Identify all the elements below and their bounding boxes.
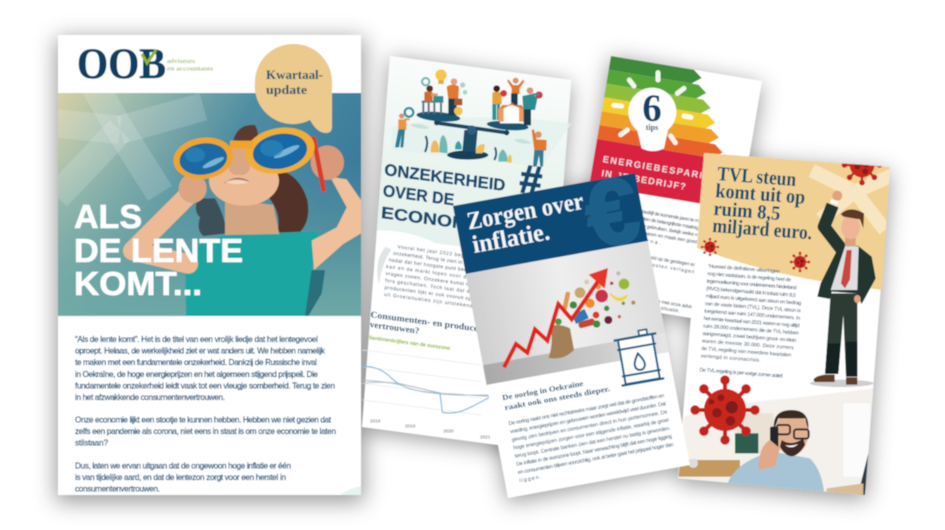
article text	[384, 243, 547, 319]
article text: de TVL-regeling van meerdere kwartalen	[701, 346, 791, 359]
heading	[381, 161, 506, 238]
panel: Onzekerheid over de economie: vertrouwen?	[369, 319, 420, 336]
logo: OOB adviseurs en accountants: OOB	[77, 41, 166, 88]
article text: het eerste kwartaal van 2021 waren er nog altijd	[703, 316, 800, 329]
icon: light bulb with 6 tips	[614, 73, 691, 151]
white article panel: liggen.	[519, 474, 542, 484]
article text	[699, 264, 804, 381]
people on left pan	[422, 78, 463, 115]
panel: Onzekerheid over de economie: Sentimentcijfers van de eurozone	[369, 335, 450, 352]
white article panel: en consumenten blijven voorzichtig, ook al beter gaat het prijspeil hoger dan	[517, 442, 674, 476]
mint header background	[376, 56, 571, 259]
speech bubble: Kwartaal-update	[255, 44, 332, 133]
article text: kan en de markt lopen voor de positie van de ondernemer	[386, 264, 545, 291]
panel: energiebesparing: ENERGIEBESPARING	[602, 154, 720, 183]
red arrow	[504, 276, 602, 367]
bulb and gears	[405, 69, 467, 117]
article text: uit Groeisituaties zijn uitstekende ontwikkelingen mogelijk	[384, 292, 543, 319]
title: ruim 8,5	[713, 198, 781, 225]
line chart: 2019	[405, 423, 416, 428]
article text: Meer weten? Neem gerust contact op met onze adviseurs voor	[582, 286, 713, 314]
white article panel	[487, 352, 690, 498]
cover intro text: oproept. Helaas, de werkelijkheid ziet er wat anders uit. We hebben namelijk	[75, 346, 326, 356]
icon: oil barrel	[613, 328, 664, 386]
cover corner accent	[340, 486, 361, 495]
article text: “Hoewel de definitieve uitkeringen	[708, 264, 780, 275]
energy label bars	[597, 56, 735, 159]
blue title band	[452, 172, 648, 274]
character: businessman with raised fist	[810, 191, 876, 387]
cover intro text: “Als de lente komt”. Het is de titel van een vrolijk liedje dat het lentegevoel	[75, 335, 318, 344]
grocery bag	[549, 325, 574, 359]
white article panel: hoge energieprijzen zorgen voor een stijgende inflatie, waarbij de groei	[513, 418, 669, 452]
illustration: balancing scale with people	[392, 69, 572, 167]
quote mark	[376, 246, 392, 285]
cover intro text: is van tijdelijke aard, en dat de lentezon zorgt voor een herstel in	[75, 473, 286, 482]
article text: energiebesparing. Wij zetten de belangrijkste maatregelen op een rij	[595, 208, 726, 236]
hash icon: #	[518, 157, 544, 204]
red temple	[313, 137, 324, 192]
panel: Zorgen over inflatie	[450, 157, 690, 498]
line chart: 2020	[443, 429, 454, 434]
line chart: 2018	[370, 419, 381, 424]
article text	[581, 202, 728, 320]
panel: Onzekerheid over de economie	[362, 56, 572, 451]
article text: ruim 28.000 ondernemers die de TVL hebben	[703, 323, 799, 337]
white article panel: terug loopt. Centrale banken zien dat een herstel nu lastig is geworden.	[514, 426, 671, 460]
white article panel: raakt ook ons steeds dieper.	[504, 384, 611, 412]
article text: voor bedrijven die energie gebruiken. Bekijk welke mogelijkheden	[593, 215, 725, 243]
cover intro text	[75, 335, 336, 494]
cover intro text: Dus, laten we ervan uitgaan dat de ongewoon hoge inflatie er één	[75, 462, 291, 470]
left person with gear	[395, 113, 410, 147]
blue title band: inflatie.	[470, 218, 552, 259]
plants	[410, 124, 532, 163]
article text: onzekerheid. Terug te zien in het vertrouwen van de consument,	[393, 251, 547, 277]
white article panel: gevolg zien bedrijven en consumenten direct in hun portemonnee. De	[511, 409, 668, 443]
title: TVL steun	[716, 163, 797, 191]
cover title	[74, 198, 243, 302]
article text: nadat dat het hoogste punt bereikte in de zomer van vorig jaar	[388, 257, 546, 284]
article text: tegemoetkoming voor ondernemers Nederland	[706, 279, 797, 291]
cover photo sky	[58, 93, 361, 316]
article text: miljard euro is uitgekeerd aan steun en bedrag	[705, 294, 802, 307]
sunglasses	[172, 126, 316, 180]
girl arms	[133, 193, 191, 264]
illustration: rising red arrow and grocery bag	[504, 268, 635, 367]
girl hair	[233, 125, 258, 143]
chart heading: Consumenten- en producenten-	[370, 309, 500, 336]
panel: TVL steun	[677, 146, 897, 500]
article text: een persoonlijk gesprek over uw situatie.	[581, 292, 680, 315]
white article panel: De inflatie in de eurozone loopt. Naar verwachting blijft dat een hoge ligging	[516, 434, 673, 468]
heading: OVER DE	[382, 182, 455, 209]
article text: nog niet vaststaan, is de regeling heel de	[707, 271, 791, 283]
line chart: 2021	[480, 435, 491, 440]
article text: voor later daarna.	[591, 229, 661, 247]
girl head and neck	[225, 198, 279, 235]
white article panel: voeding, energieprijzen en gebouwen worden wereldwijd veel duurder. Dat	[510, 401, 667, 435]
logo: OOB adviseurs en accountants	[77, 41, 214, 88]
title: miljard euro.	[712, 215, 813, 244]
cover photo: girl with oversized sunglasses	[40, 83, 361, 316]
panel: energiebesparing	[571, 56, 762, 323]
logo: OOB adviseurs en accountants: adviseurs	[167, 58, 196, 65]
large virus	[692, 377, 758, 443]
line chart	[362, 350, 497, 440]
speech bubble: Kwartaal-update: update	[266, 82, 307, 97]
scale	[416, 110, 529, 160]
cover title: ALS	[74, 198, 142, 235]
article text: van de vaste lasten (TVL). Deze TVL steun is	[705, 301, 801, 314]
article text: aangevraagd, zowel bedrijven groot- en klein	[702, 331, 797, 344]
article text: (RVO) bekendgemaakt dat in totaal ruim 8,5	[706, 286, 796, 299]
page base	[466, 241, 669, 386]
cover intro text: te maken met een fundamentele onzekerheid. Dankzij de Russische inval	[75, 358, 317, 367]
phone photo	[677, 387, 877, 500]
article text: fors geschatten. Toch laat dat de stand in de eurozone zien	[385, 278, 544, 305]
blue title band: Zorgen over	[465, 188, 586, 235]
girl shirt	[185, 231, 325, 316]
article text: De kans is groot dat uw bedrijf de komende jaren te maken krijgt met	[596, 202, 728, 229]
white article panel: De oorlog raakt ons niet rechtstreeks maar zorgt wel dat de grondstoffen en	[508, 393, 665, 427]
blue title band: €	[577, 158, 647, 267]
panel: energiebesparing: IN JE BEDRIJF?	[601, 168, 687, 192]
article text: waren de meeste 30.000. Deze zomers	[702, 338, 794, 351]
logo: OOB adviseurs en accountants: en accountants	[167, 66, 214, 72]
article text: en kunt u sneller uw kosten verlagen.	[587, 252, 697, 276]
virus icons	[700, 162, 882, 273]
white article panel: De oorlog in Oekraïne	[501, 379, 585, 402]
cover intro text: fundamentele onzekerheid leidt vaak tot een vleugje somberheid. Terug te zien	[75, 382, 335, 390]
heading: ECONOMIE?	[381, 204, 499, 237]
cover intro text: zelfs een pandemie als corona, niet eens in staat is om onze economie te laten	[75, 427, 336, 436]
groceries	[555, 271, 635, 329]
cover intro text: in Oekraïne, de hoge energieprijzen en het algemeen stijgend prijspeil. Die	[75, 370, 318, 379]
cover intro text: Onze economie lijkt een stootje te kunnen hebben. Hebben we niet gezien dat	[75, 416, 332, 424]
cover title: DE LENTE	[74, 232, 243, 269]
article text: er zijn om energie te besparen en maak een goed energieplan	[592, 222, 724, 250]
panel: energiebesparing: tips	[646, 123, 658, 132]
title: komt uit op	[715, 180, 806, 209]
article text: De TVL-regeling is per vorige zomer actief.	[699, 367, 784, 380]
page shadows	[56, 38, 890, 503]
panel: energiebesparing: 6	[642, 87, 662, 130]
article text: vragen zonen. Onzekere kunst met consumptie en investering	[385, 271, 545, 298]
tan header shape	[697, 153, 890, 290]
heading: ONZEKERHEID	[384, 161, 506, 195]
article text: producenten lijkt er ook vooruit op de Europese Centrale Bank	[384, 285, 544, 312]
panel: main magazine cover	[40, 35, 361, 495]
speech bubble: Kwartaal-update: Kwartaal-	[266, 67, 323, 82]
article text: toegekend aan ruim 147.000 ondernemers. In	[704, 309, 800, 322]
cover intro text: in het afzwakkende consumentenvertrouwen.	[75, 393, 225, 402]
floor strip	[483, 332, 669, 387]
article text: Vooral het jaar 2022 begon met forse prijsstijgingen en	[397, 244, 547, 270]
cover intro text: consumentenvertrouwen.	[75, 484, 160, 494]
title	[711, 163, 817, 244]
people on right pan	[492, 78, 543, 125]
article text: verlengd in coronacrisis.	[700, 353, 761, 364]
cover intro text: stilstaan?	[75, 438, 108, 448]
right person waving	[532, 129, 547, 167]
article text: Zo bent u straks beter voorbereid op de gestegen energieprijzen	[589, 245, 720, 272]
red title band	[589, 139, 747, 210]
cover title: KOMT...	[74, 265, 202, 302]
pale star	[812, 171, 897, 230]
